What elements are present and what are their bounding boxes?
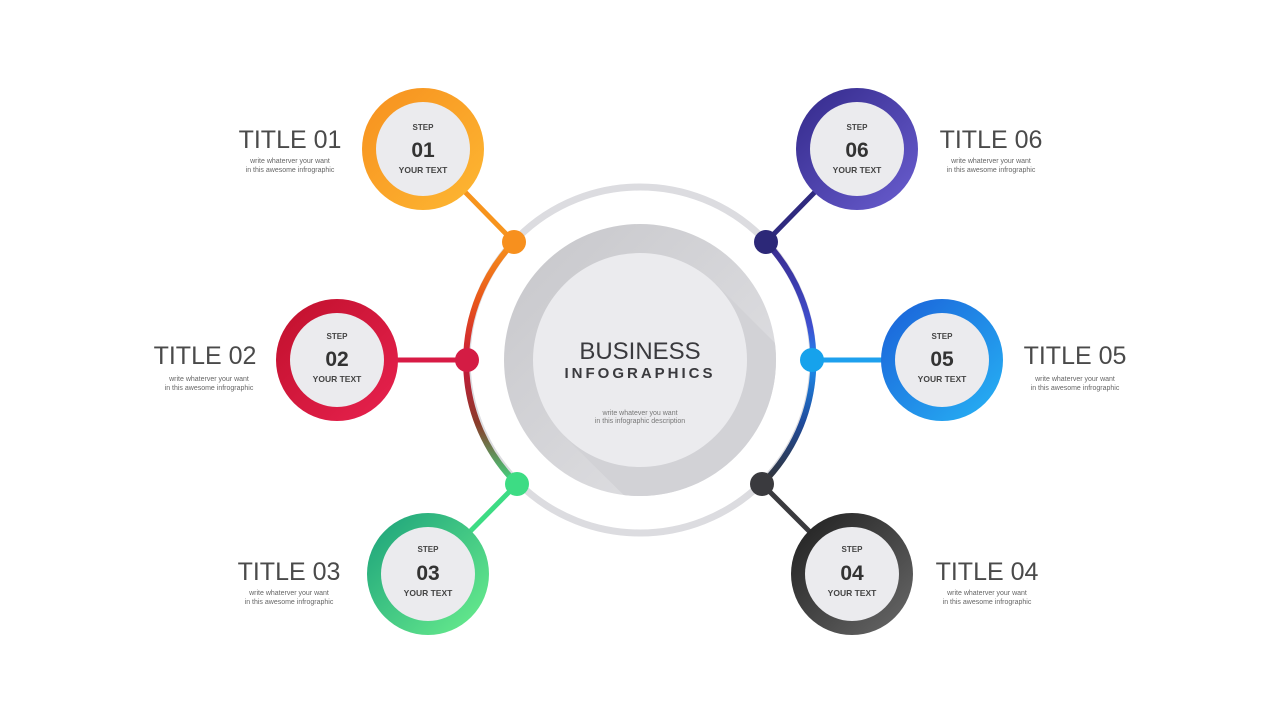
ring: right colored arc <box>762 242 813 484</box>
title 05: write whaterver your want <box>1034 376 1115 383</box>
center title: BUSINESS <box>579 338 701 365</box>
title 04: write whaterver your want <box>946 590 1027 597</box>
step 01: 01 <box>411 139 435 162</box>
title 01: write whaterver your want <box>249 158 330 165</box>
step 01: STEP <box>413 123 434 132</box>
ring dots <box>455 230 824 496</box>
title 06 <box>940 126 1042 174</box>
step 02 <box>276 299 398 421</box>
ring: gray outer ring <box>467 187 813 533</box>
step 04 <box>791 513 913 635</box>
title 04: TITLE 04 <box>936 558 1039 586</box>
title 02: TITLE 02 <box>154 342 256 370</box>
step 05 <box>881 299 1003 421</box>
step 02: YOUR TEXT <box>313 374 362 384</box>
connectors <box>337 149 942 574</box>
title 04 <box>936 558 1039 606</box>
step 04: 04 <box>840 562 864 585</box>
title 03: in this awesome infrographic <box>245 599 334 606</box>
step 04: YOUR TEXT <box>828 588 877 598</box>
step 05: STEP <box>932 332 953 341</box>
center description: write whatever you want <box>601 410 678 417</box>
step 06 <box>796 88 918 210</box>
center disc <box>504 224 776 496</box>
step 03: YOUR TEXT <box>404 588 453 598</box>
step 03 <box>367 513 489 635</box>
ring: left colored arc <box>466 242 517 484</box>
title 02: write whaterver your want <box>168 376 249 383</box>
title 01: TITLE 01 <box>239 126 341 154</box>
step 04: STEP <box>842 545 863 554</box>
title 04: in this awesome infrographic <box>943 599 1032 606</box>
step 01: YOUR TEXT <box>399 165 448 175</box>
step 06: STEP <box>847 123 868 132</box>
step 02: 02 <box>325 348 349 371</box>
title 06: TITLE 06 <box>940 126 1042 154</box>
step 06: YOUR TEXT <box>833 165 882 175</box>
title 06: in this awesome infrographic <box>947 167 1036 174</box>
title 03: write whaterver your want <box>248 590 329 597</box>
title 06: write whaterver your want <box>950 158 1031 165</box>
title 03 <box>238 558 340 606</box>
title 05: TITLE 05 <box>1024 342 1126 370</box>
step 05: YOUR TEXT <box>918 374 967 384</box>
title 01: in this awesome infrographic <box>246 167 335 174</box>
step 06: 06 <box>845 139 869 162</box>
title 01 <box>239 126 341 174</box>
step 01 <box>362 88 484 210</box>
step 02: STEP <box>327 332 348 341</box>
title 02: in this awesome infrographic <box>165 385 254 392</box>
title 05 <box>1024 342 1126 392</box>
step 05: 05 <box>930 348 954 371</box>
step 03: STEP <box>418 545 439 554</box>
step 03: 03 <box>416 562 440 585</box>
title 03: TITLE 03 <box>238 558 340 586</box>
title 02 <box>154 342 256 392</box>
title 05: in this awesome infrographic <box>1031 385 1120 392</box>
center disc: in this infographic description <box>595 418 685 425</box>
center disc: INFOGRAPHICS <box>564 365 716 382</box>
